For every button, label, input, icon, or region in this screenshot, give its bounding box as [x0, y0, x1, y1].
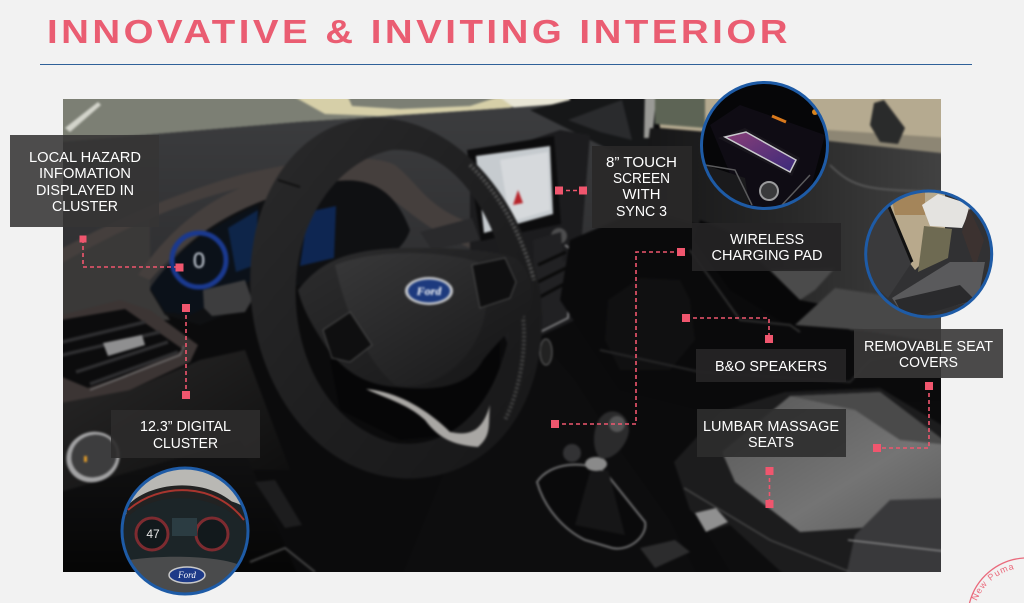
- inset circle: digital cluster: 47: [146, 527, 160, 541]
- brown dash trim: [50, 158, 470, 280]
- label: local hazard information: CLUSTER: [52, 198, 118, 215]
- wiper stalks under wheel: [432, 220, 479, 244]
- label: local hazard information: [10, 135, 159, 227]
- label: touch screen: SCREEN: [613, 170, 670, 187]
- inset circle: digital cluster: [120, 465, 250, 600]
- label: wireless charging pad: CHARGING PAD: [712, 247, 823, 264]
- door upper panel: [640, 128, 950, 340]
- label: digital cluster: CLUSTER: [153, 435, 218, 452]
- label: touch screen: [592, 146, 692, 228]
- label: lumbar massage seats: LUMBAR MASSAGE: [703, 418, 839, 435]
- knob and slot bezel: [551, 228, 567, 244]
- label: removable seat covers: COVERS: [899, 354, 958, 371]
- pedal: [255, 480, 302, 528]
- lower door sill: [600, 349, 856, 384]
- air vent: [63, 308, 198, 404]
- title rule: [40, 64, 972, 65]
- label: digital cluster: [111, 410, 260, 458]
- side window: [658, 99, 941, 139]
- start button: [540, 339, 552, 365]
- label: removable seat covers: REMOVABLE SEAT: [864, 338, 993, 355]
- lower left dash: [63, 350, 273, 491]
- gear shaft collar: [585, 457, 607, 471]
- connector: touch screen: [555, 186, 587, 194]
- armrest: [795, 288, 929, 330]
- centre stack: [470, 130, 590, 350]
- inset circle: digital cluster: Ford: [177, 570, 196, 580]
- seat: [674, 388, 950, 580]
- steering wheel: [250, 118, 542, 478]
- left dash face: [63, 236, 170, 321]
- centre console: [400, 345, 700, 580]
- label: digital cluster: 12.3” DIGITAL: [140, 418, 231, 435]
- small console buttons: [640, 540, 690, 568]
- label: touch screen: SYNC 3: [616, 203, 667, 220]
- label: touch screen: WITH: [622, 186, 660, 203]
- label: lumbar massage seats: [697, 409, 846, 457]
- label: B&O speakers: B&O SPEAKERS: [715, 358, 827, 375]
- Ford badge: [405, 277, 453, 305]
- touch screen: [467, 136, 561, 241]
- stamp: New Puma: New Puma: [972, 565, 1014, 600]
- centre airbag pad: [336, 254, 472, 341]
- door pull: [699, 220, 818, 308]
- windscreen pillar and mirror: [531, 99, 648, 146]
- photo: car interior: [50, 90, 950, 580]
- light switch knob: [64, 430, 121, 484]
- connector: wireless charging pad: [551, 248, 685, 428]
- digital cluster display: 0: [193, 248, 205, 273]
- gear boot: [575, 470, 625, 535]
- inset circle: removable seat covers: [864, 190, 994, 320]
- connector: hazard info: [80, 236, 184, 272]
- cluster hood: [150, 180, 410, 325]
- label: wireless charging pad: [692, 223, 841, 271]
- title: INNOVATIVE & INVITING INTERIOR: [47, 13, 791, 50]
- gear knob: [594, 411, 629, 459]
- label: local hazard information: DISPLAYED IN: [36, 182, 134, 199]
- dog-like object outside: [870, 100, 905, 144]
- wheel controls left: [323, 312, 372, 362]
- lower wheel opening: [330, 340, 500, 440]
- inset circle: wireless charging pad: [700, 80, 830, 210]
- wheel controls right: [472, 258, 516, 308]
- label: local hazard information: INFOMATION: [39, 165, 131, 182]
- Ford badge: Ford: [416, 284, 442, 298]
- digital cluster display: [150, 205, 337, 292]
- label: wireless charging pad: WIRELESS: [730, 231, 804, 248]
- wheel hub: [298, 248, 532, 389]
- label: removable seat covers: [854, 329, 1003, 378]
- door lower panel: [560, 228, 619, 320]
- connector: removable seat covers: [873, 382, 933, 452]
- dashboard top: [63, 104, 604, 287]
- connector: digital cluster: [182, 304, 190, 399]
- windshield view: [63, 99, 572, 142]
- label: local hazard information: LOCAL HAZARD: [29, 149, 141, 166]
- gear surround: [537, 465, 645, 549]
- floor mat edge: [250, 548, 315, 572]
- indicator stalk: [203, 280, 252, 316]
- label: touch screen: 8” TOUCH: [606, 154, 677, 171]
- label: lumbar massage seats: SEATS: [748, 434, 794, 451]
- connector: lumbar massage: [766, 467, 774, 508]
- silver lower spoke: [366, 389, 490, 447]
- speaker cover: [605, 278, 695, 370]
- label: B&O speakers: [696, 349, 846, 382]
- connector: speakers: [682, 314, 773, 343]
